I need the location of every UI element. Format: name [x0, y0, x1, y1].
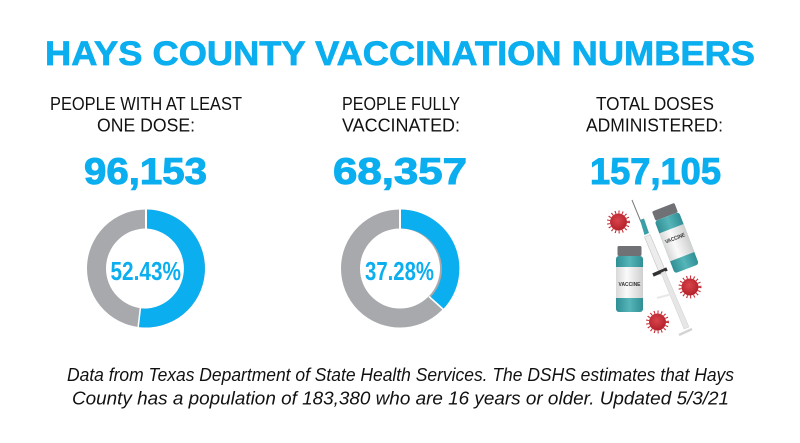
column 2 heading: PEOPLE FULLY [342, 94, 460, 114]
icon: virus bottom [648, 312, 668, 332]
column 2 heading: VACCINATED: [342, 116, 460, 136]
footnote [67, 365, 734, 408]
column 3 heading: ADMINISTERED: [586, 116, 723, 136]
column 1 number: 96,153 [84, 150, 207, 192]
illustration: vaccine vials, syringe and virus [608, 200, 700, 335]
icon: syringe [632, 200, 692, 335]
column 1 heading: ONE DOSE: [97, 116, 195, 136]
column 3 heading [586, 94, 723, 136]
donut value: 37.28% [365, 258, 434, 286]
donut value: 52.43% [110, 258, 181, 286]
icon: vial right: VACCINE [664, 232, 686, 245]
column 2 number: 68,357 [333, 150, 467, 192]
column 1 heading [50, 94, 242, 136]
title: HAYS COUNTY VACCINATION NUMBERS [45, 35, 755, 73]
donut chart: fully vaccinated [350, 208, 459, 318]
icon: virus right [680, 277, 700, 297]
column 1 heading: PEOPLE WITH AT LEAST [50, 94, 242, 114]
footnote: Data from Texas Department of State Health Services. The DSHS estimates that Hays [67, 365, 734, 385]
icon: virus top [608, 212, 628, 232]
column 2 heading [342, 94, 460, 136]
icon: vial left: VACCINE [618, 282, 641, 288]
column 3 heading: TOTAL DOSES [596, 94, 714, 114]
column 3 number: 157,105 [590, 150, 721, 192]
donut chart: at least one dose [96, 208, 205, 328]
footnote: County has a population of 183,380 who are 16 years or older. Updated 5/3/21 [72, 388, 729, 408]
